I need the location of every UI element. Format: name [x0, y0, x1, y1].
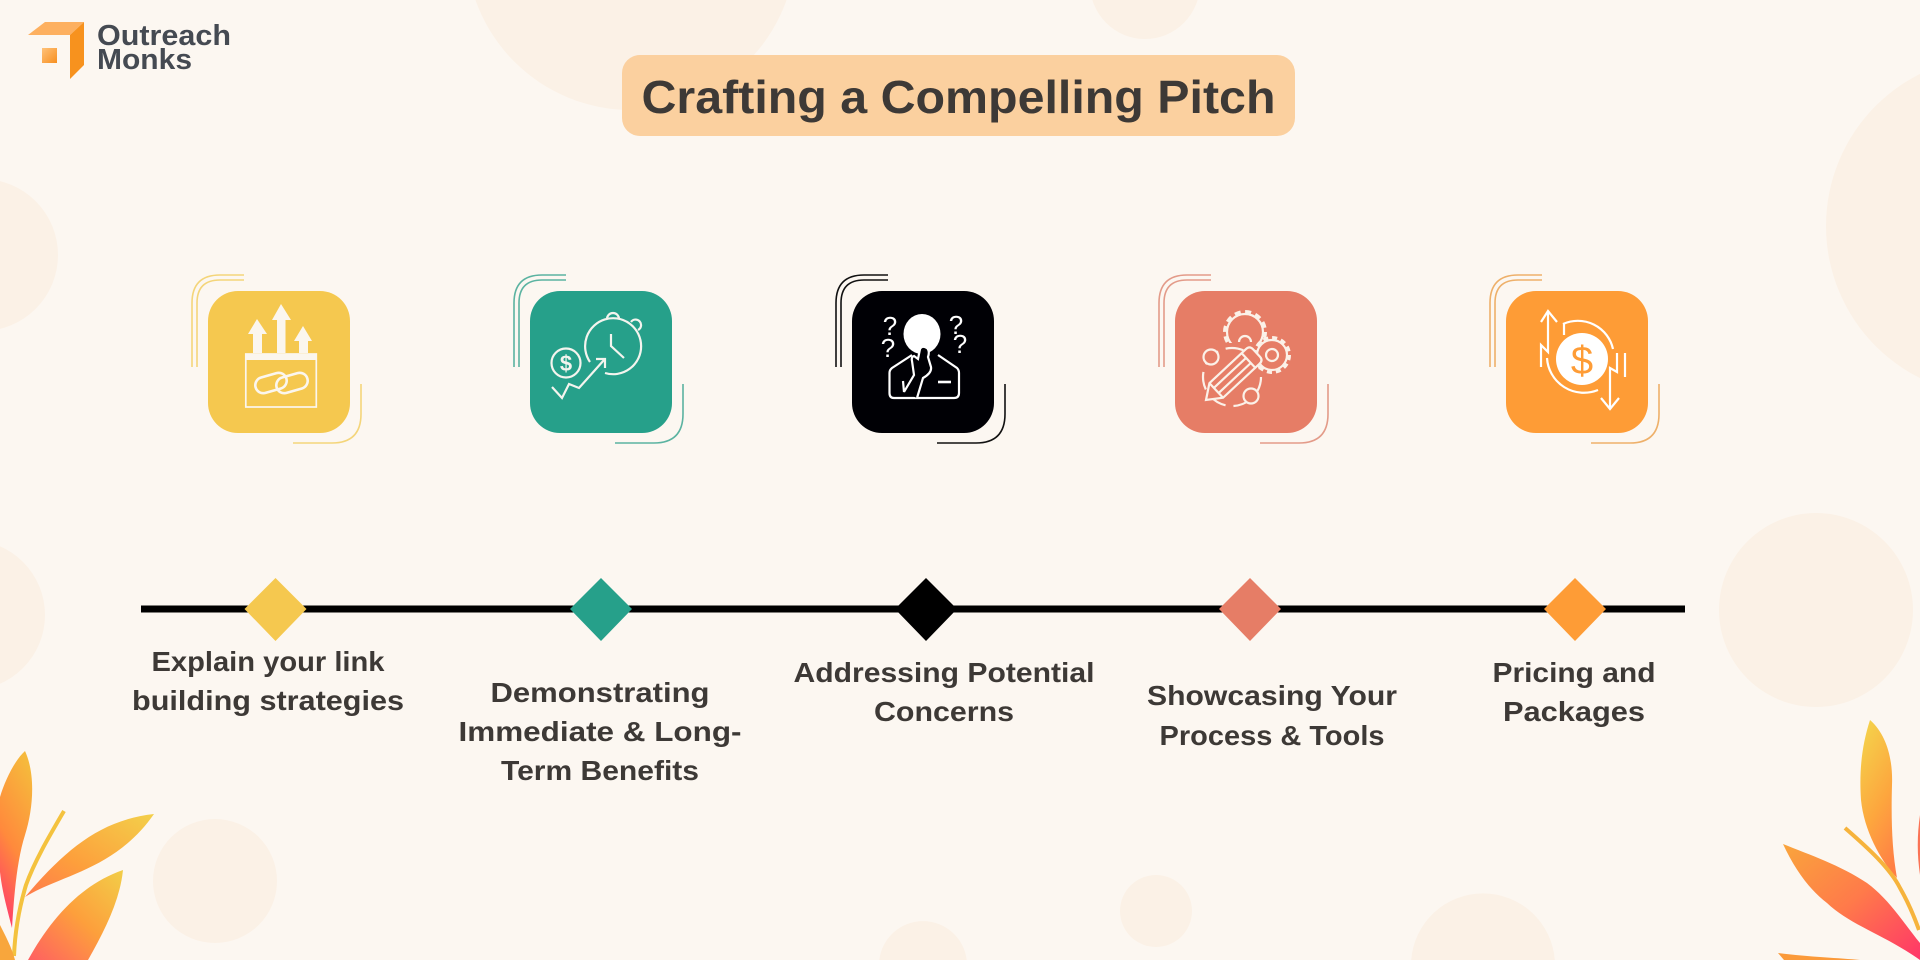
icon card: addressing concerns: ? [881, 333, 895, 363]
label: process and tools: Process & Tools [1160, 720, 1384, 751]
label: benefits [458, 677, 742, 786]
logo wordmark: Monks [97, 44, 192, 76]
diamond marker 4 [1219, 578, 1281, 641]
label: concerns [794, 657, 1094, 727]
diamond marker 1 [244, 578, 306, 641]
label: pricing: Pricing and [1492, 657, 1656, 688]
leaves: bottom right [1778, 720, 1920, 960]
icon card: link building [192, 275, 361, 443]
logo [28, 20, 231, 79]
label: explain strategies: Explain your link [152, 646, 385, 677]
icon card: pricing: $ [1571, 339, 1593, 383]
icon card: time and money: $ [560, 351, 572, 376]
diamond marker 2 [570, 578, 632, 641]
label: process and tools: Showcasing Your [1147, 680, 1397, 711]
timeline line [141, 606, 1685, 612]
icon card: process and tools [1159, 275, 1328, 443]
title [622, 55, 1295, 136]
diamond marker 5 [1544, 578, 1606, 641]
label: concerns: Addressing Potential [794, 657, 1094, 688]
label: explain strategies: building strategies [132, 685, 404, 716]
icon card: addressing concerns: ? [883, 311, 897, 341]
label: pricing: Packages [1503, 696, 1645, 727]
label: concerns: Concerns [874, 696, 1014, 727]
label: benefits: Demonstrating [490, 677, 710, 708]
icon card: pricing [1490, 275, 1659, 443]
icon card: addressing concerns: ? [949, 310, 963, 340]
label: process and tools [1147, 680, 1397, 751]
icon card: addressing concerns: ? [953, 329, 967, 359]
label: benefits: Term Benefits [501, 755, 699, 786]
label: benefits: Immediate & Long- [458, 716, 742, 747]
icon card: time and money [514, 275, 683, 443]
leaves: bottom left [0, 751, 154, 960]
label: explain strategies [132, 646, 404, 716]
logo wordmark: Outreach [97, 20, 231, 52]
icon card: addressing concerns [836, 275, 1005, 443]
logo wordmark [97, 20, 231, 76]
timeline [141, 578, 1685, 641]
title: Crafting a Compelling Pitch [642, 71, 1276, 123]
diamond marker 3 [895, 578, 957, 641]
label: pricing [1492, 657, 1656, 727]
logo mark [28, 22, 84, 79]
